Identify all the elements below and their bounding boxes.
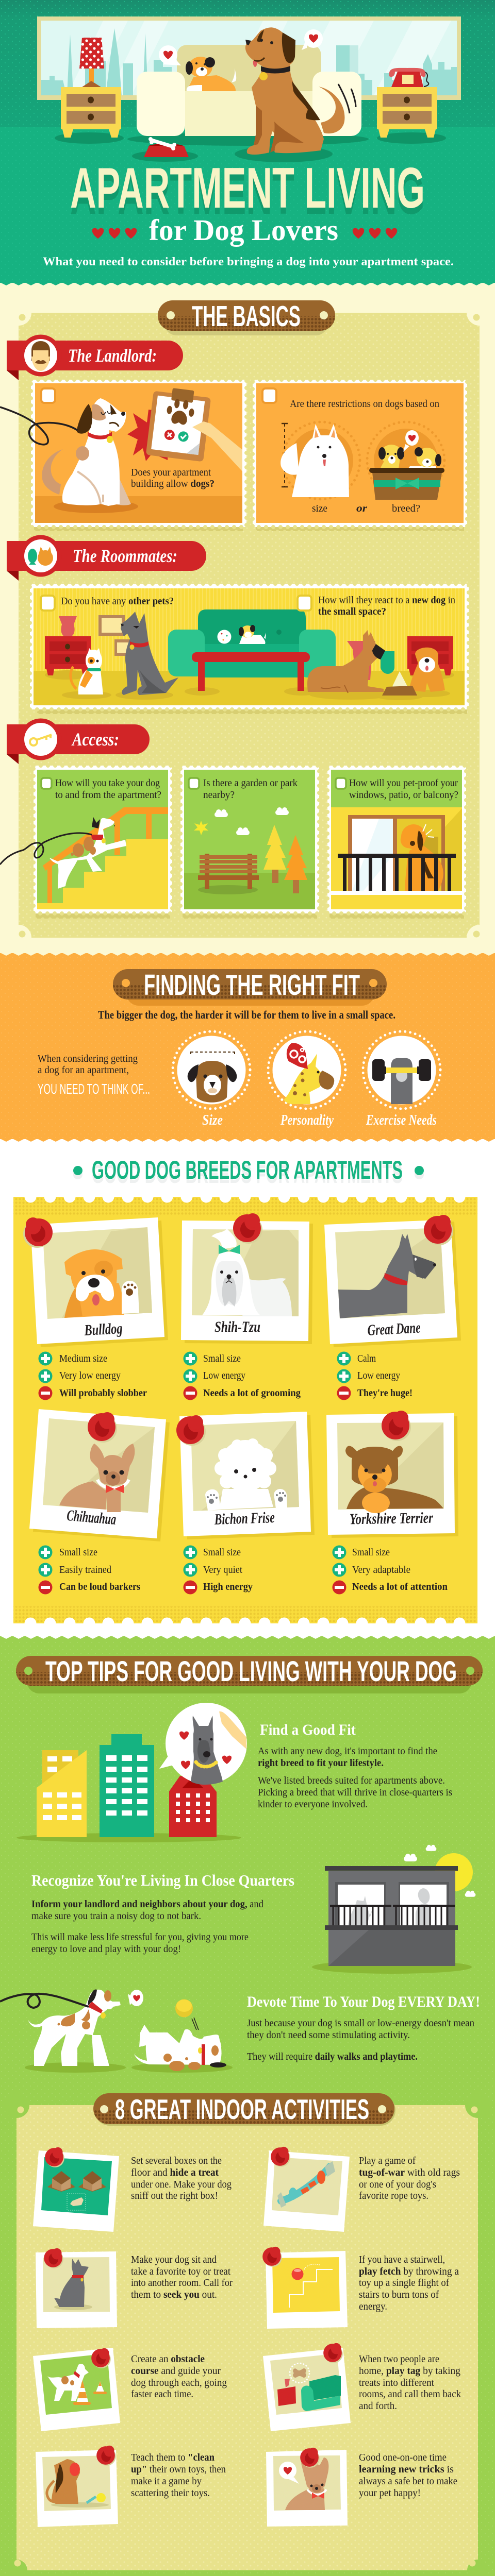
stamp frame xyxy=(180,766,319,919)
activity text: course and guide your xyxy=(131,2365,221,2377)
pros and cons: chihuahua: Can be loud barkers xyxy=(59,1581,140,1592)
illustration: small dogs in pot xyxy=(367,422,444,500)
polaroid: bichon frise xyxy=(176,1412,315,1539)
polaroid: bichon frise: Bichon Frise xyxy=(214,1509,275,1528)
panel: indoor activities xyxy=(4,2092,491,2576)
activity text xyxy=(131,2452,226,2499)
labels: size or breed: or xyxy=(356,503,367,514)
icon: key xyxy=(30,735,52,745)
question text xyxy=(349,777,458,801)
checkbox xyxy=(41,388,55,403)
labels: size personality exercise: Size xyxy=(202,1112,223,1128)
labels: size or breed xyxy=(312,503,420,514)
text block: when considering xyxy=(38,1053,150,1097)
question text xyxy=(131,467,214,489)
activity text: up" their own toys, then xyxy=(131,2464,226,2475)
illustration: balcony railing xyxy=(331,854,462,895)
pros and cons: shih-tzu xyxy=(184,1352,301,1400)
illustration: apartment building with balconies xyxy=(312,1845,475,1974)
checkbox xyxy=(336,778,346,789)
scalloped edges xyxy=(25,1191,465,1629)
labels: size or breed: breed? xyxy=(392,503,420,514)
ball and puppy on sofa xyxy=(218,625,266,644)
pros and cons: yorkshire terrier: Very adaptable xyxy=(352,1564,410,1575)
stamp frame xyxy=(30,584,469,715)
illustration: bichon frise xyxy=(205,1438,287,1511)
question text: other pets: Do you have any other pets? xyxy=(61,596,174,607)
pros and cons: shih-tzu: Needs a lot of grooming xyxy=(203,1387,301,1399)
illustration: stairs and ball xyxy=(289,2264,333,2308)
activity text: If you have a stairwell, xyxy=(359,2254,445,2265)
activity text: When two people are xyxy=(359,2353,439,2365)
activity text: take a favorite toy or treat xyxy=(131,2266,230,2277)
activity text: scattering their toys. xyxy=(131,2487,210,2499)
text block: close quarters: Inform your landlord and neighbors about your dog, and xyxy=(31,1899,263,1910)
pros and cons: great dane: They're huge! xyxy=(357,1387,412,1399)
text block: when considering: When considering getting xyxy=(38,1053,138,1064)
text block: find a good fit xyxy=(258,1721,452,1810)
pros and cons: chihuahua: Easily trained xyxy=(59,1564,111,1575)
activity text xyxy=(359,2353,461,2412)
question text xyxy=(55,777,161,801)
text block: devote time xyxy=(247,1993,480,2062)
activity text: learning new tricks is xyxy=(359,2464,454,2475)
question text: nearby? xyxy=(203,789,235,801)
panel: breeds xyxy=(13,1191,477,1629)
illustration: window door xyxy=(348,815,445,891)
activity text: sniff out the right box! xyxy=(131,2190,218,2201)
card: balcony xyxy=(327,766,466,919)
polaroid: bulldog xyxy=(23,1217,168,1347)
pros and cons: chihuahua xyxy=(38,1546,140,1594)
card: landlord question xyxy=(0,380,246,532)
illustration: boxes xyxy=(47,2171,106,2210)
pros and cons: bulldog: Very low energy xyxy=(59,1370,121,1381)
food bowl xyxy=(376,671,423,700)
text block: close quarters: Recognize You're Living In Close Quarters xyxy=(31,1871,294,1889)
illustration: chihuahua xyxy=(59,1444,135,1512)
activity 3: seek you out xyxy=(36,2248,233,2328)
ribbon: access: Access: xyxy=(71,729,119,750)
activity 5: obstacle course xyxy=(33,2348,227,2431)
pros and cons: bulldog xyxy=(38,1352,147,1400)
orange dog xyxy=(406,648,450,697)
question text: How will you pet-proof your xyxy=(349,777,458,789)
icon: size xyxy=(173,1031,250,1109)
activity text: or one of your dog's xyxy=(359,2179,436,2190)
intro sentence: What you need to consider before bringing a dog into your apartment space. xyxy=(43,255,454,268)
polaroid: yorkshire terrier xyxy=(326,1411,458,1538)
pros and cons: shih-tzu: Small size xyxy=(203,1353,241,1364)
food bowl with bone xyxy=(132,137,198,162)
question text: to and from the apartment? xyxy=(55,789,161,801)
pros and cons: bichon frise: Very quiet xyxy=(203,1564,242,1575)
ribbon: the landlord xyxy=(7,335,183,380)
stamp frame xyxy=(253,380,467,532)
right furniture xyxy=(347,636,454,680)
illustration: white dog on leash xyxy=(0,398,138,513)
text block: devote time: They will require daily walks and playtime. xyxy=(247,2051,418,2062)
activity text: your pet happy! xyxy=(359,2487,421,2499)
illustration: bone, cabinet, sofa xyxy=(277,2363,341,2411)
heading sign: 8 great indoor activities xyxy=(93,2093,395,2126)
stamp frame xyxy=(327,766,466,919)
illustration: chihuahua with heart xyxy=(279,2458,328,2510)
polaroid: shih-tzu: Shih-Tzu xyxy=(214,1318,260,1335)
illustration: sun and clouds xyxy=(194,807,289,835)
standing dog on leash xyxy=(0,1990,143,2073)
text block: find a good fit: As with any new dog, it's important to find the xyxy=(258,1745,437,1757)
activity text xyxy=(359,2155,460,2201)
polaroid: great dane xyxy=(324,1215,461,1347)
pros and cons: great dane xyxy=(337,1352,412,1400)
illustration: bubble with petted dog xyxy=(159,1703,247,1785)
question text: Is there a garden or park xyxy=(203,777,298,789)
text block: when considering: YOU NEED TO THINK OF... xyxy=(38,1081,150,1097)
activity text: rooms, and call them back xyxy=(359,2388,461,2400)
question text: new dog: How will they react to a new dog in xyxy=(318,595,455,606)
activity text: floor and hide a treat xyxy=(131,2167,219,2178)
checkbox xyxy=(298,596,311,611)
illustration: sitting gray dog xyxy=(54,2259,92,2310)
activity text: Create an obstacle xyxy=(131,2353,205,2365)
big brown dog with heart bubble xyxy=(235,27,356,162)
icon: landlord face xyxy=(31,341,50,371)
activity text xyxy=(359,2452,457,2499)
pros and cons: yorkshire terrier xyxy=(332,1546,448,1594)
illustration: spotted dog climbing with leash xyxy=(0,817,126,889)
subtitle: for Dog Lovers with hearts xyxy=(92,213,397,247)
illustration: trees xyxy=(263,825,307,893)
right nightstand with telephone xyxy=(377,68,446,144)
text block: find a good fit: Picking a breed that will thrive in close-quarters is xyxy=(258,1787,452,1798)
illustration: great dane xyxy=(338,1234,436,1318)
activity 1: hide a treat xyxy=(33,2147,232,2232)
pros and cons: shih-tzu: Low energy xyxy=(203,1370,245,1381)
activity text xyxy=(131,2254,233,2300)
checkbox xyxy=(189,778,199,789)
icon: exercise needs xyxy=(363,1031,440,1109)
activity text: energy. xyxy=(359,2301,387,2312)
question text: Are there restrictions on dogs based on xyxy=(290,398,439,410)
checkbox xyxy=(41,778,52,789)
question text: windows, patio, or balcony? xyxy=(349,789,458,801)
illustration: rope toy xyxy=(277,2161,335,2208)
polaroid: bulldog: Bulldog xyxy=(84,1320,123,1339)
activity 8: new tricks xyxy=(266,2448,457,2527)
ribbon: the roommates xyxy=(7,535,206,581)
illustration: yorkshire terrier xyxy=(345,1446,443,1513)
card: roommates scene xyxy=(30,584,469,715)
illustration: dog on balcony xyxy=(401,824,443,891)
subtitle: for Dog Lovers with hearts: for Dog Lovers xyxy=(149,213,338,247)
labels: size personality exercise xyxy=(202,1112,437,1128)
question text: How will you take your dog xyxy=(55,777,160,789)
polaroid: yorkshire terrier: Yorkshire Terrier xyxy=(350,1510,433,1528)
activity text: into another room. Call for xyxy=(131,2277,233,2289)
activity text: always a safe bet to make xyxy=(359,2476,457,2487)
brown lying dog xyxy=(307,630,392,700)
pros and cons: chihuahua: Small size xyxy=(59,1547,97,1558)
question text: building allow dogs? xyxy=(131,478,214,489)
labels: size personality exercise: Personality xyxy=(280,1112,334,1128)
activity text: Teach them to "clean xyxy=(131,2452,214,2463)
illustration: shih-tzu xyxy=(202,1229,292,1316)
text block: find a good fit: kinder to everyone involved. xyxy=(258,1799,368,1810)
card: park xyxy=(180,766,319,919)
illustration: dog and cones xyxy=(47,2364,107,2405)
polaroid: great dane: Great Dane xyxy=(367,1319,421,1339)
sofa and table xyxy=(168,609,336,696)
gray dog xyxy=(116,612,178,700)
text block: close quarters: energy to love and play with your dog! xyxy=(31,1943,181,1955)
illustration: brown dog with toys xyxy=(47,2459,109,2507)
activity text: Make your dog sit and xyxy=(131,2254,217,2265)
question text: Does your apartment xyxy=(131,467,211,478)
ribbon: the landlord: The Landlord: xyxy=(68,345,157,366)
pros and cons: bichon frise: Small size xyxy=(203,1547,241,1558)
illustration: clipboard with paw xyxy=(127,386,242,471)
pros and cons: bichon frise xyxy=(184,1546,253,1594)
illustration: bench xyxy=(198,854,259,894)
question text: new dog xyxy=(318,595,455,617)
illustration: city buildings xyxy=(16,1734,241,1842)
text block: devote time: Just because your dog is small or low-energy doesn't mean xyxy=(247,2018,474,2029)
window with skyline xyxy=(37,16,461,100)
checkbox xyxy=(41,596,55,611)
panel: the basics xyxy=(0,300,492,951)
illustration: bulldog xyxy=(64,1249,139,1318)
card: stairs xyxy=(0,766,172,919)
activity text xyxy=(359,2254,459,2312)
left furniture and frames xyxy=(45,615,133,680)
icon: fish and cat xyxy=(28,547,53,566)
activity text: dog through each, going xyxy=(131,2377,227,2388)
activity text: make it a game by xyxy=(131,2476,202,2487)
text block: find a good fit: Find a Good Fit xyxy=(260,1721,356,1738)
small dog on sofa with heart bubble xyxy=(159,45,236,91)
heading sign: the basics xyxy=(158,300,335,335)
stamp frame xyxy=(31,380,246,532)
heading sign: finding the right fit xyxy=(113,969,387,1006)
pros and cons: great dane: Calm xyxy=(357,1353,376,1364)
stamp frame xyxy=(34,766,172,919)
pros and cons: great dane: Low energy xyxy=(357,1370,400,1381)
pros and cons: bulldog: Will probably slobber xyxy=(59,1387,147,1399)
labels: size personality exercise: Exercise Needs xyxy=(366,1112,437,1128)
cat xyxy=(62,648,111,699)
pros and cons: bichon frise: High energy xyxy=(203,1581,253,1592)
activity text: faster each time. xyxy=(131,2388,193,2400)
heading sign: the basics: THE BASICS xyxy=(192,300,301,333)
activity text: Set several boxes on the xyxy=(131,2155,222,2166)
polaroid: shih-tzu xyxy=(181,1213,313,1344)
activity 4: play fetch xyxy=(262,2247,459,2329)
icon: personality xyxy=(268,1031,345,1109)
pros and cons: yorkshire terrier: Needs a lot of attention xyxy=(352,1581,448,1592)
header illustration: living room xyxy=(37,16,461,162)
text block: when considering: a dog for an apartment, xyxy=(38,1064,129,1076)
activity text: toy up a single flight of xyxy=(359,2277,449,2289)
left nightstand with lamp xyxy=(55,38,124,144)
ribbon: access xyxy=(7,718,150,764)
activity text: stairs to burn tons of xyxy=(359,2289,439,2300)
activity text: and forth. xyxy=(359,2400,397,2412)
ball xyxy=(175,1999,199,2030)
question text: new dog: the small space? xyxy=(318,606,386,617)
illustration: dogs playing xyxy=(0,1990,233,2073)
rolling dog xyxy=(131,2025,233,2073)
activity text: under one. Make your dog xyxy=(131,2179,232,2190)
heading sign: finding the right fit: FINDING THE RIGHT FIT xyxy=(144,969,360,1002)
illustration: staircase and railing xyxy=(37,807,168,909)
activity 2: tug of war xyxy=(263,2147,460,2232)
text block: close quarters xyxy=(31,1871,294,1955)
sofa xyxy=(127,45,369,146)
activity text: Play a game of xyxy=(359,2155,416,2166)
activity text: favorite rope toys. xyxy=(359,2190,428,2201)
intro sentence: bigger dog: The bigger the dog, the harder it will be for them to live in a small space. xyxy=(98,1008,395,1021)
pros and cons: yorkshire terrier: Small size xyxy=(352,1547,390,1558)
activity text: them to seek you out. xyxy=(131,2289,217,2300)
text block: devote time: they don't need some stimulating activity. xyxy=(247,2029,410,2041)
activity text: Good one-on-one time xyxy=(359,2452,447,2463)
activity text xyxy=(131,2353,227,2400)
text block: find a good fit: We've listed breeds suited for apartments above. xyxy=(258,1775,445,1786)
activity text: tug-of-war with old rags xyxy=(359,2167,460,2178)
pros and cons: bulldog: Medium size xyxy=(59,1353,107,1364)
activity text: play fetch by throwing a xyxy=(359,2266,459,2277)
labels: size or breed: size xyxy=(312,503,327,514)
polaroid: chihuahua: Chihuahua xyxy=(66,1507,117,1528)
text block: find a good fit: right breed to fit your lifestyle. xyxy=(258,1757,384,1769)
question text xyxy=(203,777,298,801)
activity text: treats into different xyxy=(359,2377,434,2388)
illustration: big white dog with ruler xyxy=(280,422,360,499)
polaroid: chihuahua xyxy=(29,1409,170,1541)
activity 7: clean up xyxy=(36,2446,226,2527)
activity text: home, play tag by taking xyxy=(359,2365,460,2377)
text block: close quarters: make sure you train a noisy dog to not bark. xyxy=(31,1910,201,1922)
text block: close quarters: This will make less life stressful for you, giving you more xyxy=(31,1931,249,1943)
ribbon: the roommates: The Roommates: xyxy=(73,546,177,566)
activity text xyxy=(131,2155,232,2201)
checkbox xyxy=(262,388,276,403)
card: size or breed xyxy=(253,380,467,532)
activity 6: play tag xyxy=(263,2343,461,2431)
